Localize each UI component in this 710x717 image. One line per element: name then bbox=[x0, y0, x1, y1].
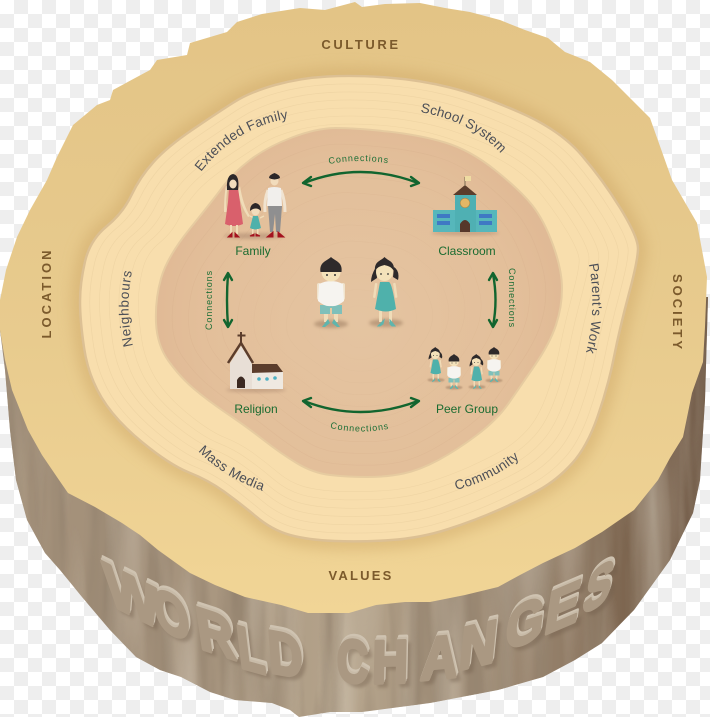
outer label: Values: VALUES bbox=[329, 568, 393, 583]
connection label: right: Connections bbox=[507, 268, 517, 328]
icon: classroom building bbox=[431, 176, 499, 236]
arrow: religion to peer group bbox=[303, 398, 419, 412]
arrow: classroom to peer group bbox=[489, 273, 497, 327]
connection label: top: Connections bbox=[328, 154, 388, 164]
icon: family figures bbox=[224, 173, 285, 239]
ring label: Parent's Work: Parent's Work bbox=[586, 264, 602, 354]
ring label: Community: Community bbox=[455, 452, 518, 489]
icon: peer group children bbox=[428, 347, 502, 390]
arrow: family to classroom bbox=[303, 172, 419, 186]
outer label: Culture: CULTURE bbox=[321, 37, 401, 52]
label: Religion: Religion bbox=[234, 402, 278, 416]
shadow around growth ring bbox=[80, 76, 638, 541]
outer label: Society: SOCIETY bbox=[670, 274, 685, 352]
arrow: family to religion bbox=[224, 273, 232, 327]
ring label: School System: School System bbox=[421, 104, 505, 153]
heading: World Changes carved lettering bbox=[100, 541, 623, 700]
icon: church bbox=[226, 332, 286, 392]
ring label: Extended Family: Extended Family bbox=[194, 110, 287, 171]
connection label: bottom: Connections bbox=[330, 422, 388, 432]
label: Classroom: Classroom bbox=[438, 244, 496, 258]
connection label: left: Connections bbox=[204, 270, 214, 330]
icon: boy bbox=[314, 257, 348, 328]
label: Peer Group: Peer Group bbox=[436, 402, 498, 416]
ring label: Neighbours: Neighbours bbox=[118, 271, 133, 347]
man bbox=[265, 173, 285, 237]
tree trunk side bark bbox=[0, 297, 708, 717]
outer label: Location: LOCATION bbox=[39, 248, 54, 338]
icon: girl bbox=[369, 257, 403, 327]
label: Family: Family bbox=[235, 244, 271, 258]
child bbox=[250, 203, 264, 236]
inner ring zone bbox=[156, 128, 562, 477]
middle ring zone bbox=[80, 76, 638, 541]
ring label: Mass Media: Mass Media bbox=[198, 445, 264, 491]
woman bbox=[224, 174, 250, 237]
